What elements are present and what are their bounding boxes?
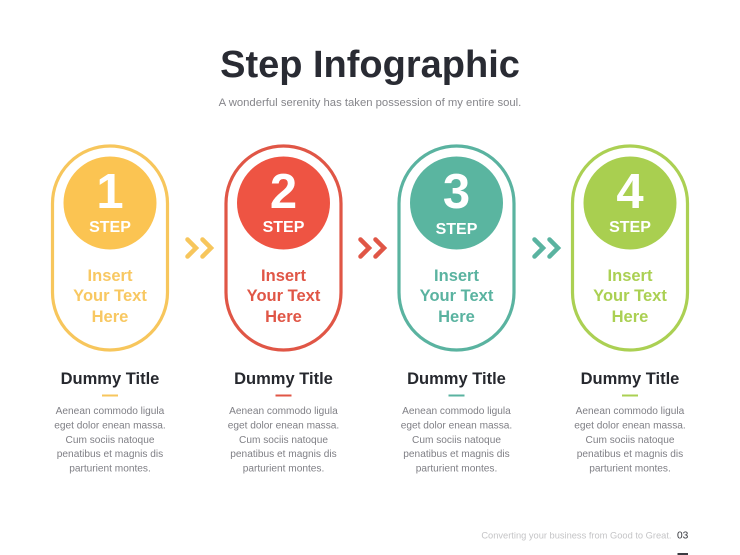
step 2 circle bbox=[237, 156, 330, 250]
column 3 description bbox=[401, 370, 512, 474]
step 4 text: Your Text bbox=[593, 287, 667, 305]
step 4 text: Insert bbox=[608, 267, 653, 285]
column 2 accent bbox=[276, 394, 292, 396]
column 2 body: penatibus et magnis dis bbox=[230, 449, 337, 460]
page number: 03 bbox=[677, 530, 689, 542]
step 2 panel bbox=[226, 146, 341, 350]
step 4 number: 4 bbox=[616, 165, 644, 219]
arrow 1 bbox=[188, 240, 211, 256]
step 1 label: STEP bbox=[89, 219, 131, 236]
column 1 accent bbox=[102, 394, 118, 396]
column 4 description bbox=[574, 370, 686, 474]
column 4 heading: Dummy Title bbox=[581, 370, 679, 388]
step 2 number: 2 bbox=[270, 165, 297, 219]
step 4 circle bbox=[584, 156, 676, 250]
step 3 number: 3 bbox=[443, 165, 470, 219]
column 3 body: eget dolor enean massa. bbox=[401, 420, 512, 432]
step 1 panel bbox=[52, 146, 168, 350]
column 3 body: penatibus et magnis dis bbox=[403, 449, 510, 460]
column 3 heading: Dummy Title bbox=[407, 370, 506, 388]
column 1 body: parturient montes. bbox=[69, 464, 151, 474]
column 3 body: Cum sociis natoque bbox=[412, 435, 501, 446]
column 4 body: penatibus et magnis dis bbox=[577, 449, 683, 460]
column 1 heading: Dummy Title bbox=[61, 370, 159, 388]
column 2 body: eget dolor enean massa. bbox=[228, 420, 339, 432]
step 3 label: STEP bbox=[436, 221, 478, 238]
column 3 accent bbox=[448, 394, 464, 396]
arrow 2 bbox=[360, 240, 384, 256]
footer tagline: Converting your business from Good to Great. bbox=[481, 530, 672, 540]
column 4 body: Aenean commodo ligula bbox=[576, 406, 685, 417]
step 1 text: Here bbox=[92, 308, 128, 326]
step 1 pill outline bbox=[52, 146, 168, 350]
column 1 description bbox=[54, 370, 166, 474]
title: Step Infographic bbox=[220, 44, 520, 86]
column 2 body: Aenean commodo ligula bbox=[229, 406, 338, 417]
arrow 3 bbox=[534, 240, 558, 256]
column 1 body: Cum sociis natoque bbox=[66, 435, 155, 446]
step 1 circle bbox=[64, 156, 156, 250]
column 4 accent bbox=[622, 394, 638, 396]
step 3 circle bbox=[410, 156, 503, 250]
step 2 text: Here bbox=[265, 308, 302, 326]
step 3 text: Insert bbox=[434, 267, 479, 285]
step 3 text: Your Text bbox=[420, 287, 494, 305]
step 1 text: Insert bbox=[88, 267, 133, 285]
step 1 text: Your Text bbox=[73, 287, 147, 305]
step 4 panel bbox=[572, 146, 688, 350]
column 1 body: eget dolor enean massa. bbox=[54, 420, 166, 432]
step 1 number: 1 bbox=[96, 165, 124, 219]
footer mark bbox=[678, 553, 688, 555]
step 4 label: STEP bbox=[609, 219, 651, 236]
column 2 heading: Dummy Title bbox=[234, 370, 333, 388]
step 2 pill outline bbox=[226, 146, 341, 350]
column 4 body: Cum sociis natoque bbox=[586, 435, 675, 446]
step 2 label: STEP bbox=[263, 219, 305, 236]
column 3 body: parturient montes. bbox=[416, 464, 497, 474]
column 1 body: Aenean commodo ligula bbox=[56, 406, 165, 417]
column 3 body: Aenean commodo ligula bbox=[402, 406, 511, 417]
column 2 body: parturient montes. bbox=[243, 464, 324, 474]
column 4 body: eget dolor enean massa. bbox=[574, 420, 686, 432]
column 4 body: parturient montes. bbox=[589, 464, 671, 474]
step 3 text: Here bbox=[438, 308, 475, 326]
column 2 description bbox=[228, 370, 339, 474]
step 3 panel bbox=[399, 146, 514, 350]
step 4 text: Here bbox=[612, 308, 648, 326]
column 1 body: penatibus et magnis dis bbox=[57, 449, 163, 460]
column 2 body: Cum sociis natoque bbox=[239, 435, 328, 446]
subtitle: A wonderful serenity has taken possession of my entire soul. bbox=[219, 97, 521, 109]
step 2 text: Insert bbox=[261, 267, 306, 285]
step 3 pill outline bbox=[399, 146, 514, 350]
step 2 text: Your Text bbox=[247, 287, 321, 305]
step 4 pill outline bbox=[572, 146, 688, 350]
